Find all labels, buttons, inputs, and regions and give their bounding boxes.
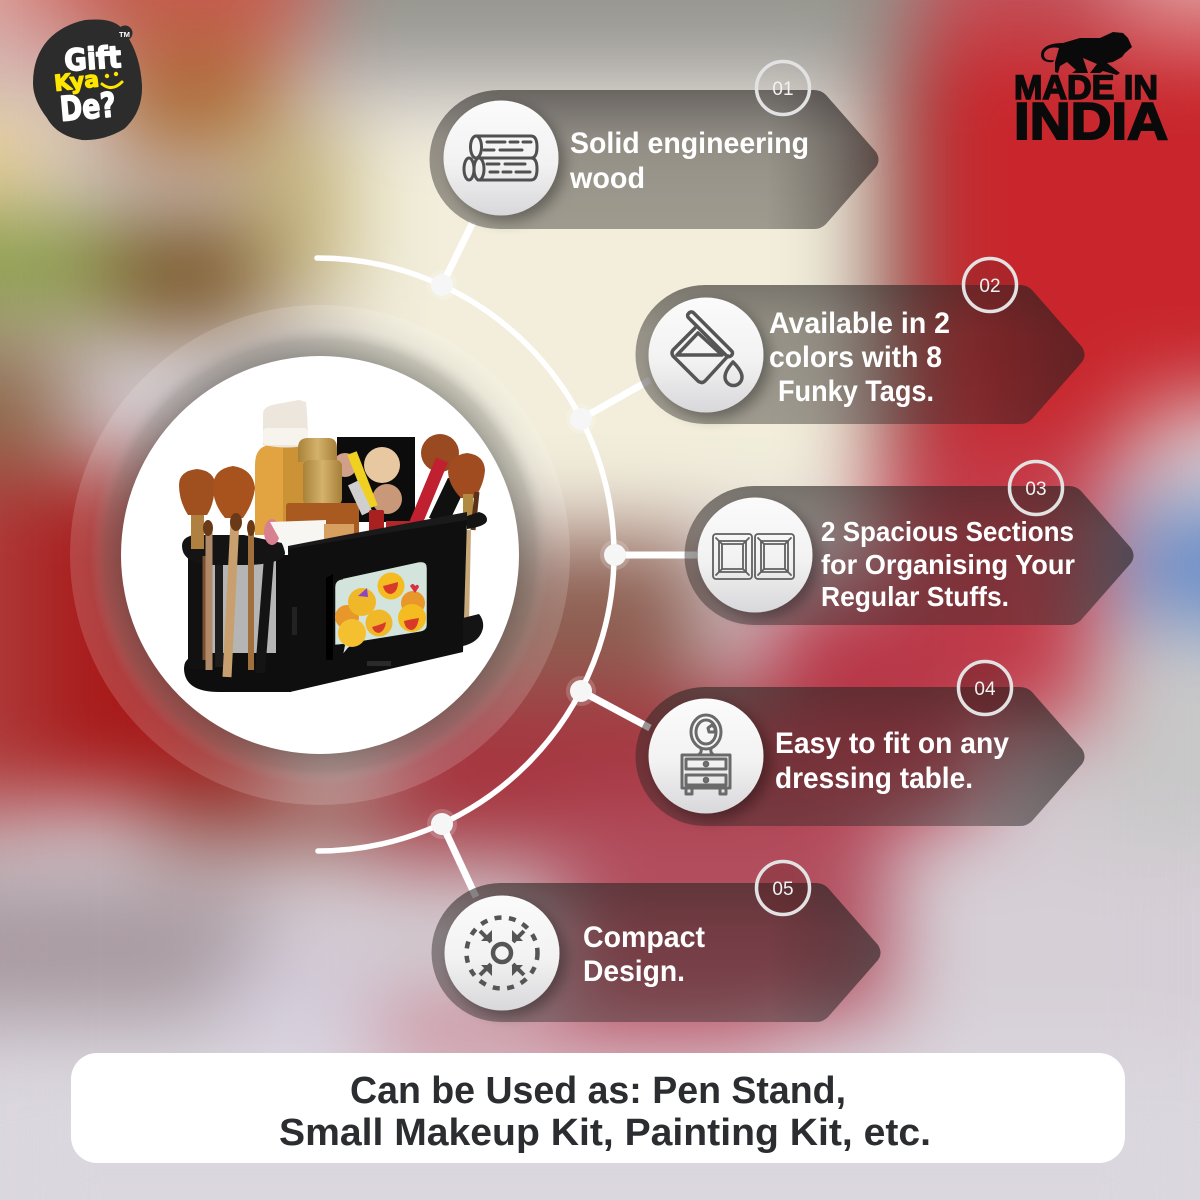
bottom usage banner: Can be Used as: Pen Stand, <box>350 1070 846 1112</box>
heading <box>821 516 1075 612</box>
number badge 02: 02 <box>979 276 1001 297</box>
number badge 02 <box>964 258 1016 312</box>
heading <box>583 921 705 988</box>
number badge 03: 03 <box>1025 479 1047 500</box>
panel 2: available in 2 colors <box>636 285 1084 424</box>
icon badge: dressing table <box>648 698 764 814</box>
heading: Funky Tags. <box>778 375 934 408</box>
heading: Solid engineering <box>570 127 809 160</box>
icon badge: two sections <box>698 498 812 612</box>
panel 3: 2 spacious sections <box>684 486 1134 625</box>
number badge 04 <box>958 662 1012 714</box>
heading: Design. <box>583 955 685 988</box>
logo: Gift Kya De <box>33 19 142 140</box>
panel 5: compact design <box>432 883 880 1022</box>
icon badge: logs <box>444 100 558 216</box>
number badge 03 <box>1010 462 1062 514</box>
connector 2 <box>581 380 650 419</box>
heading: 2 Spacious Sections <box>821 516 1074 547</box>
icon badge: paint bucket <box>648 298 764 412</box>
logo: Gift Kya De: Kya <box>53 67 100 97</box>
logo: Gift Kya De: De? <box>58 85 118 130</box>
heading: Easy to fit on any <box>775 727 1009 760</box>
panel 4: easy to fit <box>636 687 1084 826</box>
funky emoji tag <box>326 562 427 660</box>
logo: Gift Kya De: Gift <box>63 40 122 79</box>
logo: Gift Kya De: TM <box>119 30 130 39</box>
number badge 05 <box>756 862 810 914</box>
connector 1 <box>442 222 473 285</box>
panel 1: solid engineering wood <box>430 90 878 229</box>
large circle halo ring <box>70 305 570 805</box>
left holder base and columns <box>190 560 285 658</box>
heading: for Organising Your <box>821 549 1075 580</box>
heading: Available in 2 <box>769 307 950 340</box>
heading: colors with 8 <box>769 341 942 374</box>
icon badge: compact arrows <box>444 896 560 1010</box>
made in india badge: MADE IN <box>1014 69 1158 107</box>
connector 3 <box>615 552 697 558</box>
brushes <box>179 466 280 677</box>
heading: Compact <box>583 921 705 954</box>
heading <box>775 727 1009 795</box>
made in india badge <box>1014 32 1168 151</box>
main black box <box>288 520 467 692</box>
lion silhouette <box>1041 32 1132 75</box>
connector 4 <box>581 691 650 728</box>
number badge 04: 04 <box>974 679 996 700</box>
heading <box>569 127 809 195</box>
makeup items behind box <box>255 400 485 625</box>
white tube <box>270 520 326 549</box>
bottom usage banner: Small Makeup Kit, Painting Kit, etc. <box>279 1112 931 1154</box>
heading: wood <box>569 162 645 195</box>
bottom usage banner <box>71 1053 1125 1163</box>
timeline nodes <box>427 270 630 839</box>
number badge 01 <box>756 62 810 114</box>
curved timeline arc <box>317 258 614 851</box>
heading <box>769 307 950 408</box>
heading: dressing table. <box>775 762 973 795</box>
number badge 05: 05 <box>772 879 794 900</box>
heading: Regular Stuffs. <box>821 581 1009 612</box>
made in india badge: INDIA <box>1014 93 1168 151</box>
number badge 01: 01 <box>772 79 794 100</box>
right holder <box>463 512 487 646</box>
box inside shadow <box>288 512 467 552</box>
connector 5 <box>442 824 476 897</box>
product photo circle <box>121 356 519 754</box>
